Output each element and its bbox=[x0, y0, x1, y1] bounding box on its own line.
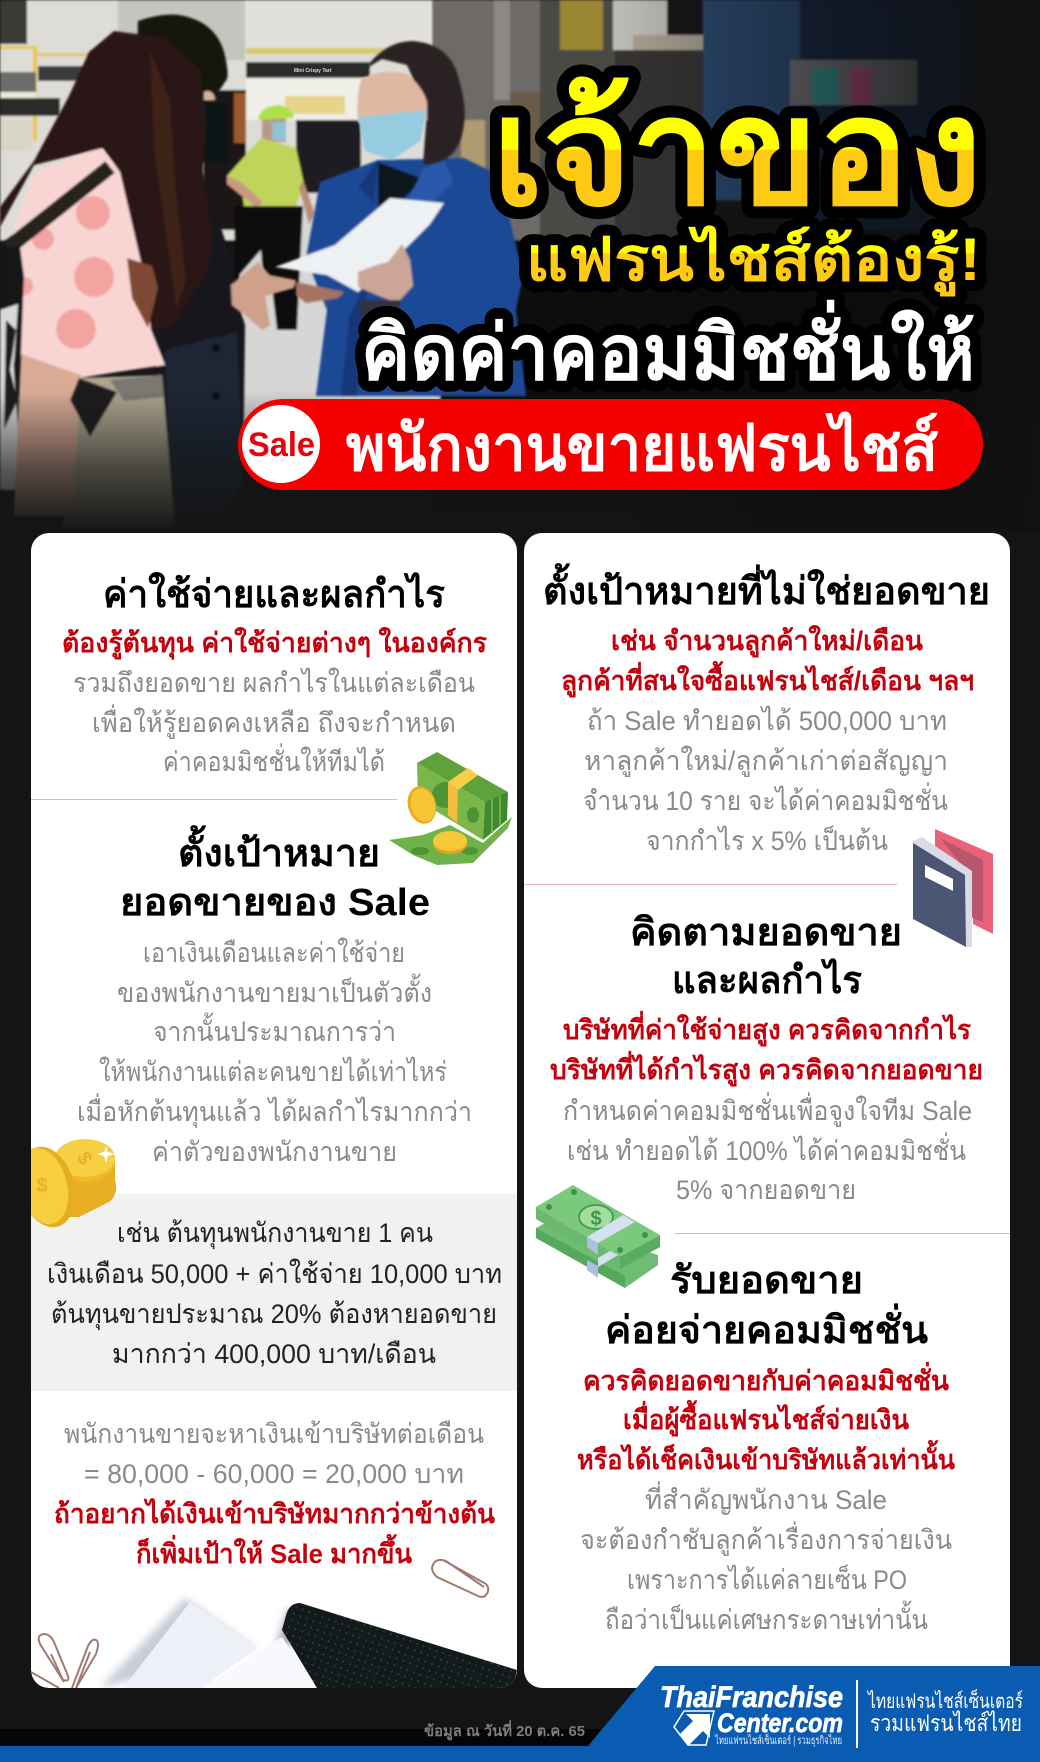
section: ตั้งเป้าหมายยอดขายของ Sale bbox=[77, 825, 472, 1167]
logo: ThaiFranchise Center.com: ThaiFranchise bbox=[660, 1681, 843, 1714]
title: เจ้าของ: เจ้าของ bbox=[492, 68, 982, 236]
example calculation text: เช่น ต้นทุนพนักงานขาย 1 คน bbox=[117, 1218, 433, 1250]
section: ตั้งเป้าหมายยอดขายของ Sale: ให้พนักงานแต่ละคนขายได้เท่าไหร่ bbox=[99, 1056, 447, 1087]
icon: paperclip bbox=[432, 1560, 488, 1597]
section: คิดตามยอดขายและผลกำไร: และผลกำไร bbox=[672, 958, 863, 1002]
section: รับยอดขายค่อยจ่ายคอมมิชชั่น: ค่อยจ่ายคอมมิชชั่น bbox=[605, 1303, 928, 1352]
paper sheets bbox=[275, 198, 444, 292]
section: รับยอดขายค่อยจ่ายคอมมิชชั่น: ที่สำคัญพนักงาน Sale bbox=[645, 1481, 887, 1515]
source date strip bbox=[0, 1714, 610, 1746]
section: ตั้งเป้าหมายยอดขายของ Sale: เมื่อหักต้นทุนแล้ว ได้ผลกำไรมากกว่า bbox=[77, 1093, 472, 1129]
section: ตั้งเป้าหมายที่ไม่ใช่ยอดขาย: จากกำไร x 5% เป็นต้น bbox=[646, 823, 888, 856]
section: รับยอดขายค่อยจ่ายคอมมิชชั่น: ควรคิดยอดขายกับค่าคอมมิชชั่น bbox=[583, 1361, 950, 1396]
icon: green banknotes bbox=[536, 1185, 660, 1288]
section: ตั้งเป้าหมายยอดขายของ Sale: ตั้งเป้าหมาย bbox=[178, 825, 380, 875]
section: ตั้งเป้าหมายที่ไม่ใช่ยอดขาย: ถ้า Sale ทำยอดได้ 500,000 บาท bbox=[587, 706, 947, 736]
icon: sale badge: Sale bbox=[248, 426, 315, 464]
section: รับยอดขายค่อยจ่ายคอมมิชชั่น: เพราะการได้แค่ลายเซ็น PO bbox=[627, 1562, 907, 1595]
conclusion text bbox=[54, 1419, 496, 1569]
section: ตั้งเป้าหมายยอดขายของ Sale: เอาเงินเดือนและค่าใช้จ่าย bbox=[143, 937, 405, 968]
woman in blue blazer bbox=[306, 158, 526, 396]
section: คิดตามยอดขายและผลกำไร: เช่น ทำยอดได้ 100% ได้ค่าคอมมิชชั่น bbox=[567, 1132, 966, 1166]
desk photo: paper and notebook bbox=[31, 1598, 517, 1688]
source date strip: ข้อมูล ณ วันที่ 20 ต.ค. 65 bbox=[424, 1720, 585, 1741]
long-hair woman in pink shirt bbox=[10, 148, 165, 378]
footer tagline bbox=[866, 1688, 1023, 1736]
red title pill: พนักงานขายแฟรนไชส์ bbox=[346, 411, 938, 484]
logo: ThaiFranchise Center.com: ไทยแฟรนไชส์เซ็นเตอร์ | รวมธุรกิจไทย bbox=[714, 1733, 842, 1747]
conclusion text: ก็เพิ่มเป้าให้ Sale มากขึ้น bbox=[136, 1533, 413, 1569]
section: ตั้งเป้าหมายที่ไม่ใช่ยอดขาย: จำนวน 10 ราย จะได้ค่าคอมมิชชั่น bbox=[583, 782, 948, 816]
section: รับยอดขายค่อยจ่ายคอมมิชชั่น bbox=[577, 1260, 955, 1635]
section: ตั้งเป้าหมายยอดขายของ Sale: ค่าตัวของพนักงานขาย bbox=[152, 1137, 397, 1167]
conclusion text: ถ้าอยากได้เงินเข้าบริษัทมากกว่าข้างต้น bbox=[54, 1498, 496, 1529]
conclusion text: = 80,000 - 60,000 = 20,000 บาท bbox=[84, 1459, 464, 1489]
example band bbox=[31, 1194, 517, 1391]
icon: books bbox=[913, 829, 993, 947]
section: คิดตามยอดขายและผลกำไร: 5% จากยอดขาย bbox=[676, 1175, 856, 1205]
section: คิดตามยอดขายและผลกำไร: บริษัทที่ค่าใช้จ่ายสูง ควรคิดจากกำไร bbox=[563, 1010, 971, 1047]
title: แฟรนไชส์ต้องรู้!: แฟรนไชส์ต้องรู้! bbox=[526, 224, 981, 297]
section: ตั้งเป้าหมายที่ไม่ใช่ยอดขาย: ลูกค้าที่สนใจซื้อแฟรนไชส์/เดือน ฯลฯ bbox=[561, 660, 974, 698]
section: คิดตามยอดขายและผลกำไร: กำหนดค่าคอมมิชชั่นเพื่อจูงใจทีม Sale bbox=[563, 1092, 972, 1127]
section: คิดตามยอดขายและผลกำไร bbox=[550, 912, 983, 1205]
example calculation text: ต้นทุนขายประมาณ 20% ต้องหายอดขาย bbox=[51, 1299, 497, 1331]
icon: sale badge bbox=[242, 405, 320, 483]
section: ค่าใช้จ่ายและผลกำไร: รวมถึงยอดขาย ผลกำไรในแต่ละเดือน bbox=[73, 667, 475, 698]
section: ตั้งเป้าหมายที่ไม่ใช่ยอดขาย: ตั้งเป้าหมายที่ไม่ใช่ยอดขาย bbox=[543, 563, 990, 613]
panel: right column bbox=[524, 533, 1010, 1688]
section: ค่าใช้จ่ายและผลกำไร: เพื่อให้รู้ยอดคงเหลือ ถึงจะกำหนด bbox=[92, 704, 456, 739]
section: ตั้งเป้าหมายที่ไม่ใช่ยอดขาย: หาลูกค้าใหม่/ลูกค้าเก่าต่อสัญญา bbox=[584, 745, 948, 777]
section: รับยอดขายค่อยจ่ายคอมมิชชั่น: รับยอดขาย bbox=[670, 1260, 863, 1302]
section: คิดตามยอดขายและผลกำไร: บริษัทที่ได้กำไรสูง ควรคิดจากยอดขาย bbox=[550, 1050, 983, 1087]
footer: brand band bbox=[0, 1666, 1040, 1762]
fade overlays bbox=[0, 390, 1040, 533]
section: ค่าใช้จ่ายและผลกำไร: ค่าใช้จ่ายและผลกำไร bbox=[103, 572, 446, 616]
section: ตั้งเป้าหมายยอดขายของ Sale: จากนั้นประมาณการว่า bbox=[153, 1012, 396, 1047]
hero photo: franchise staff talking at expo bbox=[0, 0, 1040, 533]
example calculation text bbox=[47, 1218, 502, 1369]
section: ตั้งเป้าหมายที่ไม่ใช่ยอดขาย bbox=[543, 563, 990, 856]
icon: green banknotes: $ bbox=[590, 1208, 602, 1230]
section: ตั้งเป้าหมายที่ไม่ใช่ยอดขาย: เช่น จำนวนลูกค้าใหม่/เดือน bbox=[611, 625, 924, 658]
crowd behind bbox=[296, 120, 361, 193]
section: ค่าใช้จ่ายและผลกำไร: ต้องรู้ต้นทุน ค่าใช้จ่ายต่างๆ ในองค์กร bbox=[62, 627, 487, 660]
example calculation text: มากกว่า 400,000 บาท/เดือน bbox=[112, 1339, 436, 1369]
conclusion text: พนักงานขายจะหาเงินเข้าบริษัทต่อเดือน bbox=[64, 1419, 484, 1449]
icon: gold coins: $ bbox=[72, 1148, 96, 1169]
icon: arrow bbox=[674, 1711, 714, 1745]
section: ตั้งเป้าหมายยอดขายของ Sale: ยอดขายของ Sale bbox=[120, 882, 430, 924]
hero photo: franchise staff talking at expo: Mini Crispy Tart bbox=[294, 68, 332, 74]
example calculation text: เงินเดือน 50,000 + ค่าใช้จ่าย 10,000 บาท bbox=[47, 1258, 502, 1289]
section: รับยอดขายค่อยจ่ายคอมมิชชั่น: ถือว่าเป็นแค่เศษกระดาษเท่านั้น bbox=[605, 1600, 928, 1635]
panel: left column bbox=[31, 533, 517, 1688]
section: รับยอดขายค่อยจ่ายคอมมิชชั่น: หรือได้เช็คเงินเข้าบริษัทแล้วเท่านั้น bbox=[577, 1439, 955, 1475]
icon: gold coins bbox=[31, 1139, 116, 1228]
red title pill bbox=[238, 399, 983, 490]
section: ค่าใช้จ่ายและผลกำไร: ค่าคอมมิชชั่นให้ทีมได้ bbox=[163, 743, 385, 777]
icon: cash stack with coins bbox=[389, 752, 512, 865]
section: คิดตามยอดขายและผลกำไร: คิดตามยอดขาย bbox=[630, 912, 902, 954]
section: ตั้งเป้าหมายยอดขายของ Sale: ของพนักงานขายมาเป็นตัวตั้ง bbox=[117, 973, 432, 1008]
icon: gold coins: $ bbox=[36, 1175, 48, 1197]
section: รับยอดขายค่อยจ่ายคอมมิชชั่น: จะต้องกำชับลูกค้าเรื่องการจ่ายเงิน bbox=[580, 1521, 952, 1556]
logo: ThaiFranchise Center.com bbox=[660, 1681, 843, 1747]
section: ค่าใช้จ่ายและผลกำไร bbox=[62, 572, 487, 777]
green shirt man bbox=[227, 105, 315, 330]
man behind: dark jacket bbox=[137, 15, 228, 162]
section: รับยอดขายค่อยจ่ายคอมมิชชั่น: เมื่อผู้ซื้อแฟรนไชส์จ่ายเงิน bbox=[623, 1399, 910, 1437]
pointing hand bbox=[231, 262, 296, 330]
logo: ThaiFranchise Center.com: Center.com bbox=[717, 1708, 843, 1738]
title: คิดค่าคอมมิชชั่นให้: คิดค่าคอมมิชชั่นให้ bbox=[361, 299, 975, 396]
